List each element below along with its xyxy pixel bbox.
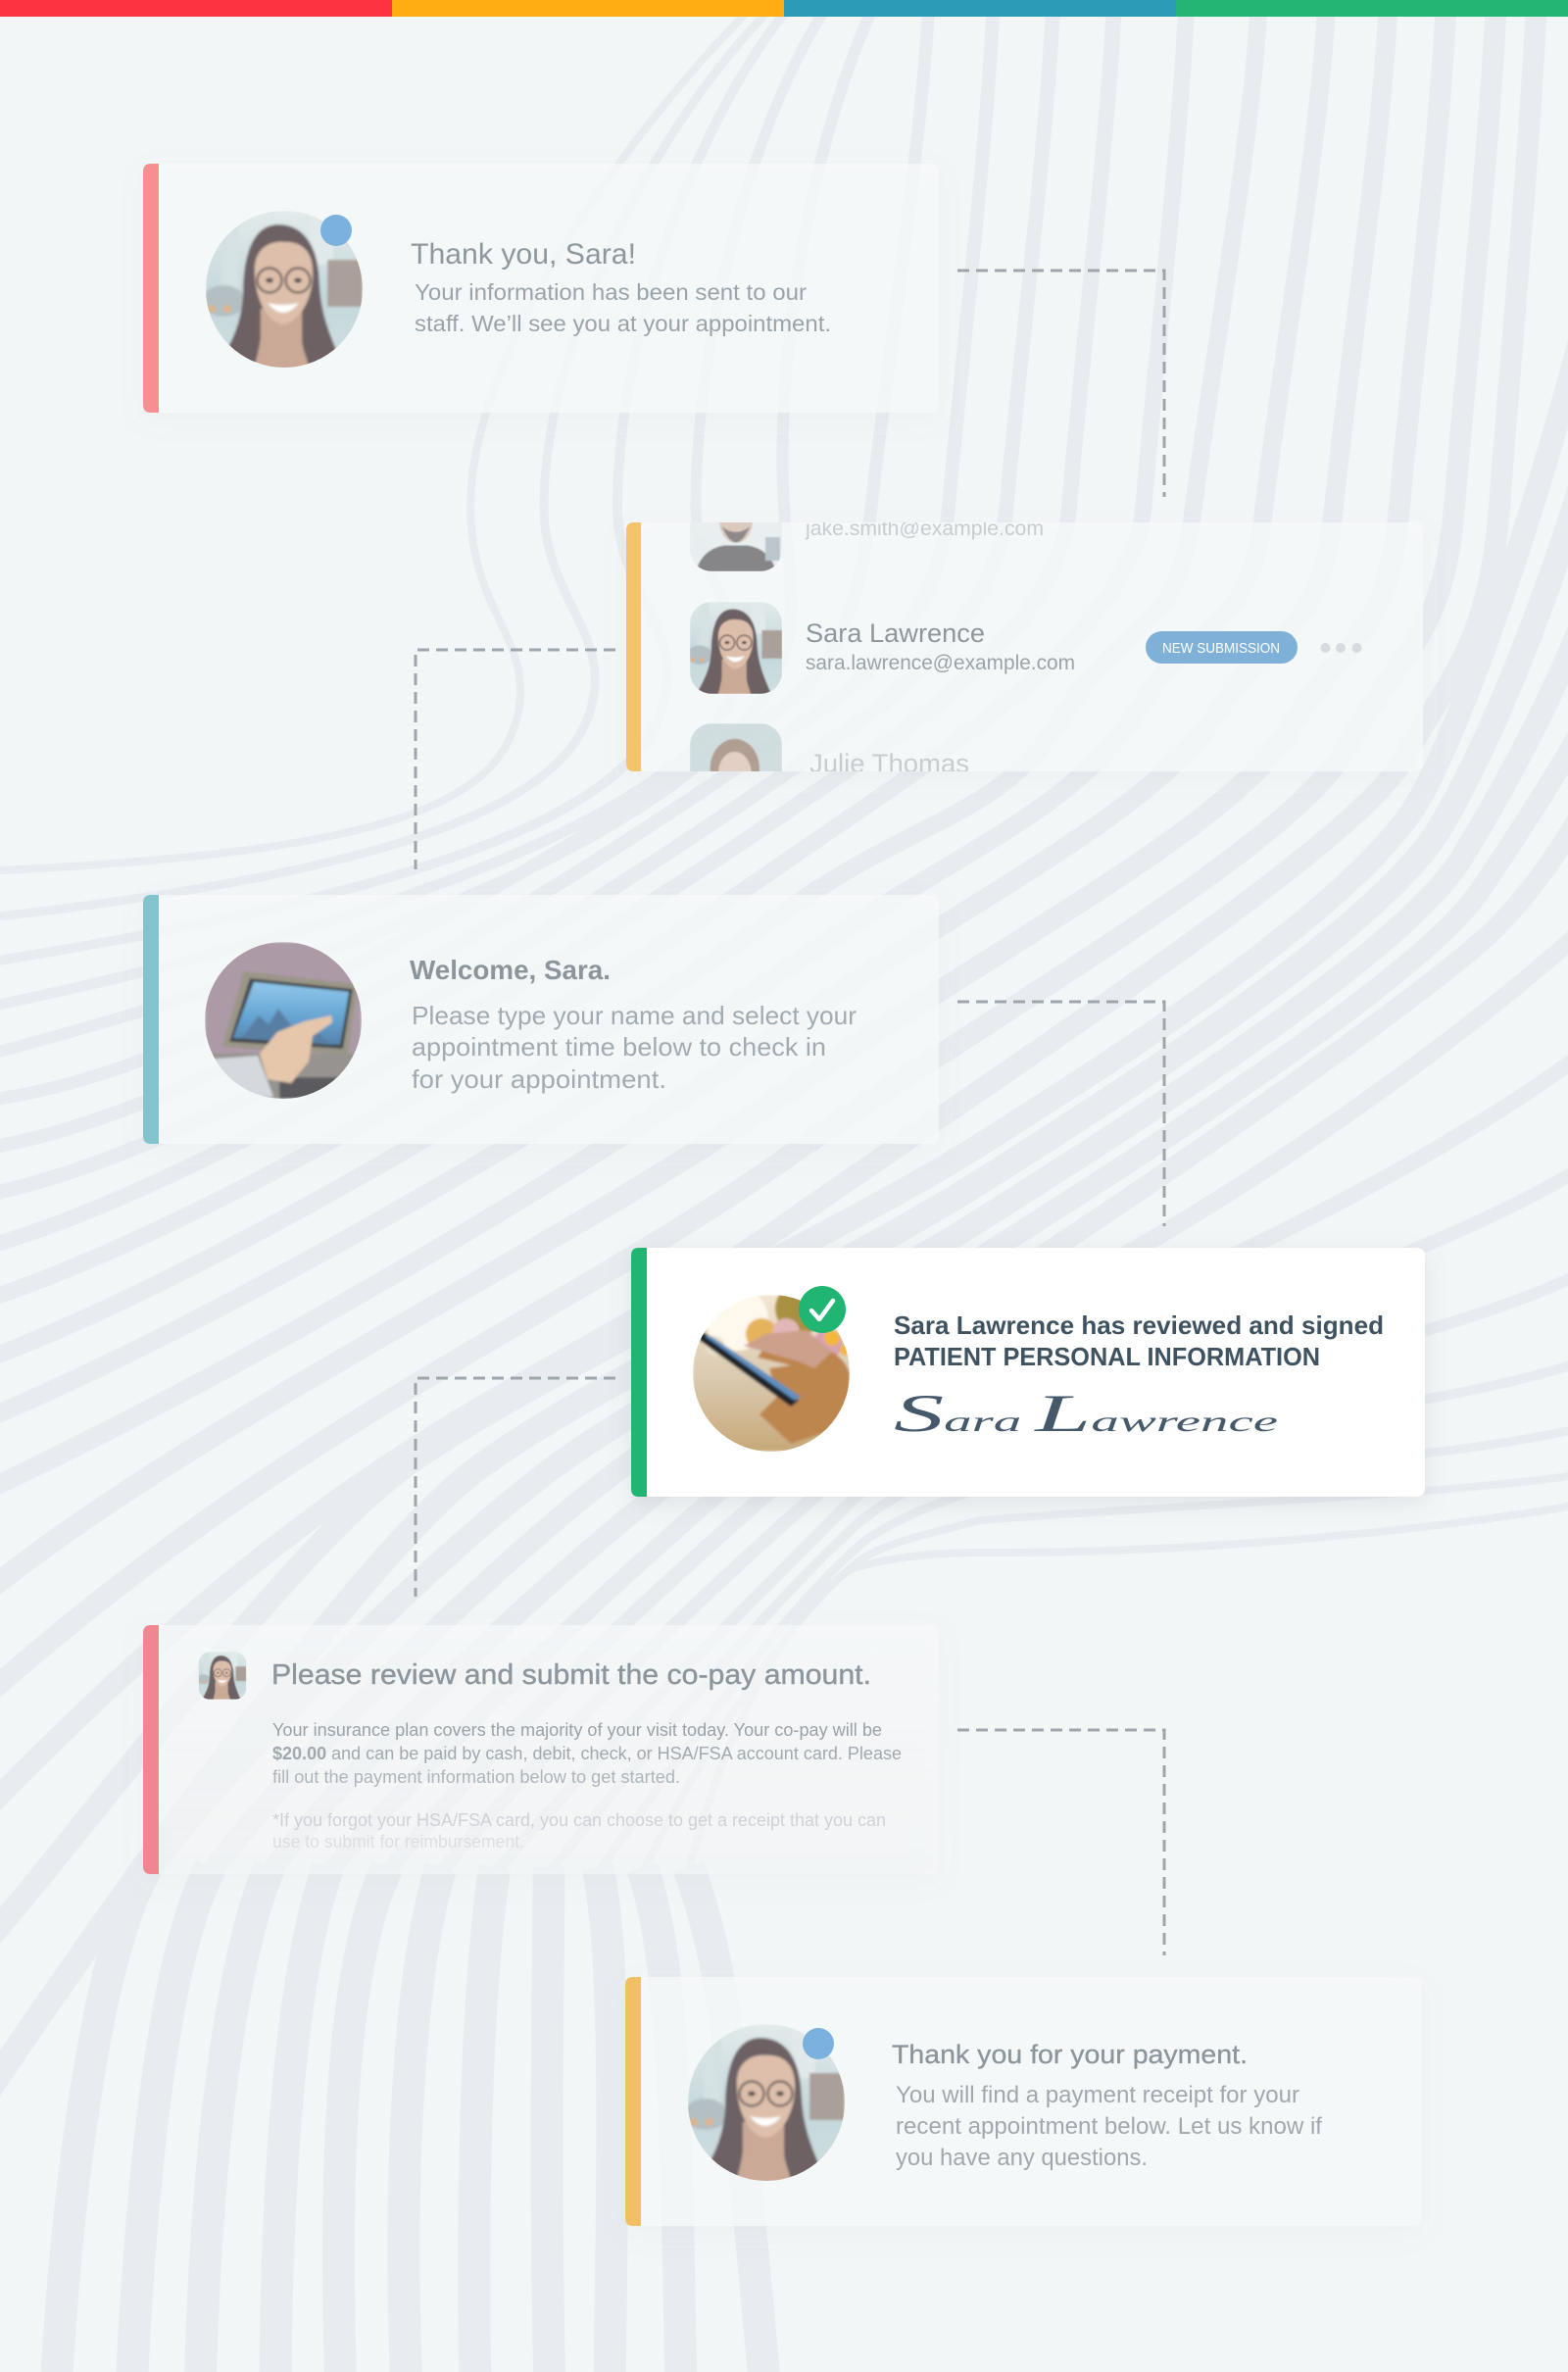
message: recent appointment below. Let us know if [896, 2113, 1322, 2140]
message: You will find a payment receipt for your [896, 2082, 1299, 2108]
message: staff. We’ll see you at your appointment. [415, 311, 831, 336]
connector arrow 2 [416, 650, 615, 869]
name: Julie Thomas: Julie Thomas [809, 749, 969, 778]
signature: S ara L awrence [894, 1384, 1278, 1443]
badge: new submission [1146, 631, 1298, 664]
menu dots [1321, 643, 1362, 653]
instructions: Please type your name and select your [412, 1001, 857, 1030]
body copy [272, 1720, 902, 1787]
heading: PATIENT PERSONAL INFORMATION [894, 1342, 1320, 1371]
instructions: appointment time below to check in [412, 1032, 826, 1062]
avatar: Julie [690, 723, 782, 771]
clipped list rows [690, 522, 1043, 771]
status dot [320, 215, 352, 246]
heading: Thank you, Sara! [411, 238, 636, 271]
message [415, 279, 831, 336]
instructions: for your appointment. [412, 1064, 666, 1094]
panel: submission list [626, 522, 1423, 771]
top colour bar [0, 0, 1568, 17]
footnote: use to submit for reimbursement. [272, 1832, 524, 1852]
image: hand on phone [691, 1283, 852, 1452]
body copy: fill out the payment information below to get started. [272, 1767, 680, 1787]
connector arrow 4 [416, 1378, 615, 1597]
heading: Sara Lawrence has reviewed and signed [894, 1310, 1384, 1340]
panel: welcome [143, 895, 939, 1144]
avatar: Sara portrait [202, 211, 363, 371]
heading: Please review and submit the co-pay amount. [271, 1659, 871, 1691]
body copy: $20.00 and can be paid by cash, debit, check, or HSA/FSA account card. Please [272, 1744, 902, 1763]
status dot [803, 2028, 834, 2059]
footnote [272, 1810, 886, 1852]
avatar: Sara row [687, 601, 783, 697]
badge: new submission: NEW SUBMISSION [1162, 640, 1280, 657]
panel: thank you Sara [143, 164, 939, 413]
avatar: Sara portrait [684, 2024, 845, 2185]
message [896, 2082, 1322, 2171]
panel: signed confirmation [631, 1248, 1425, 1497]
email: Sara: sara.lawrence@example.com [806, 652, 1075, 674]
footnote: *If you forgot your HSA/FSA card, you can choose to get a receipt that you can [272, 1810, 886, 1830]
panel: thank you for payment [625, 1977, 1322, 2226]
panel: co-pay review [143, 1625, 939, 1874]
badge: check mark [799, 1286, 846, 1333]
name: Sara Lawrence: Sara Lawrence [806, 618, 985, 648]
connector arrow 5 [957, 1730, 1164, 1955]
email: Jake: jake.smith@example.com [805, 518, 1044, 540]
message: you have any questions. [896, 2145, 1148, 2171]
connector arrow 3 [957, 1002, 1164, 1226]
instructions [412, 1001, 857, 1094]
image: hand on tablet [205, 942, 362, 1101]
connector arrow 1 [957, 271, 1164, 497]
message: Your information has been sent to our [415, 279, 807, 305]
avatar: Jake [690, 522, 782, 571]
avatar: thumbnail [197, 1652, 247, 1702]
heading: Welcome, Sara. [410, 955, 611, 985]
heading: Thank you for your payment. [892, 2040, 1248, 2069]
body copy: Your insurance plan covers the majority of your visit today. Your co-pay will be [272, 1720, 882, 1740]
heading [894, 1310, 1384, 1371]
